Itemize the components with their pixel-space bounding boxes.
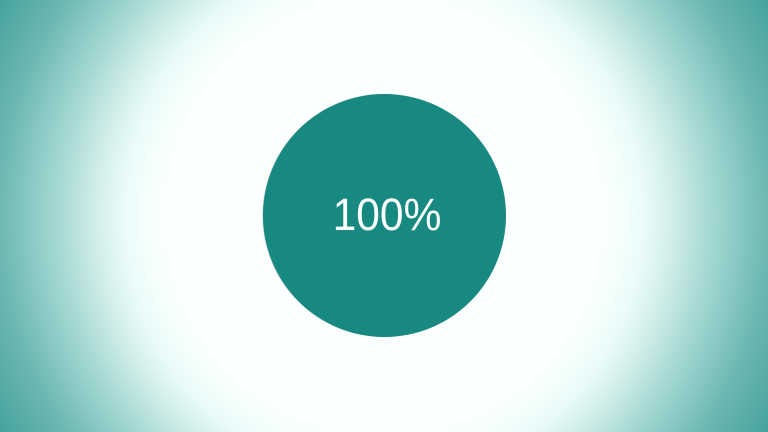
percentage label: 100%	[333, 189, 441, 240]
pie chart: full teal circle	[262, 94, 506, 337]
